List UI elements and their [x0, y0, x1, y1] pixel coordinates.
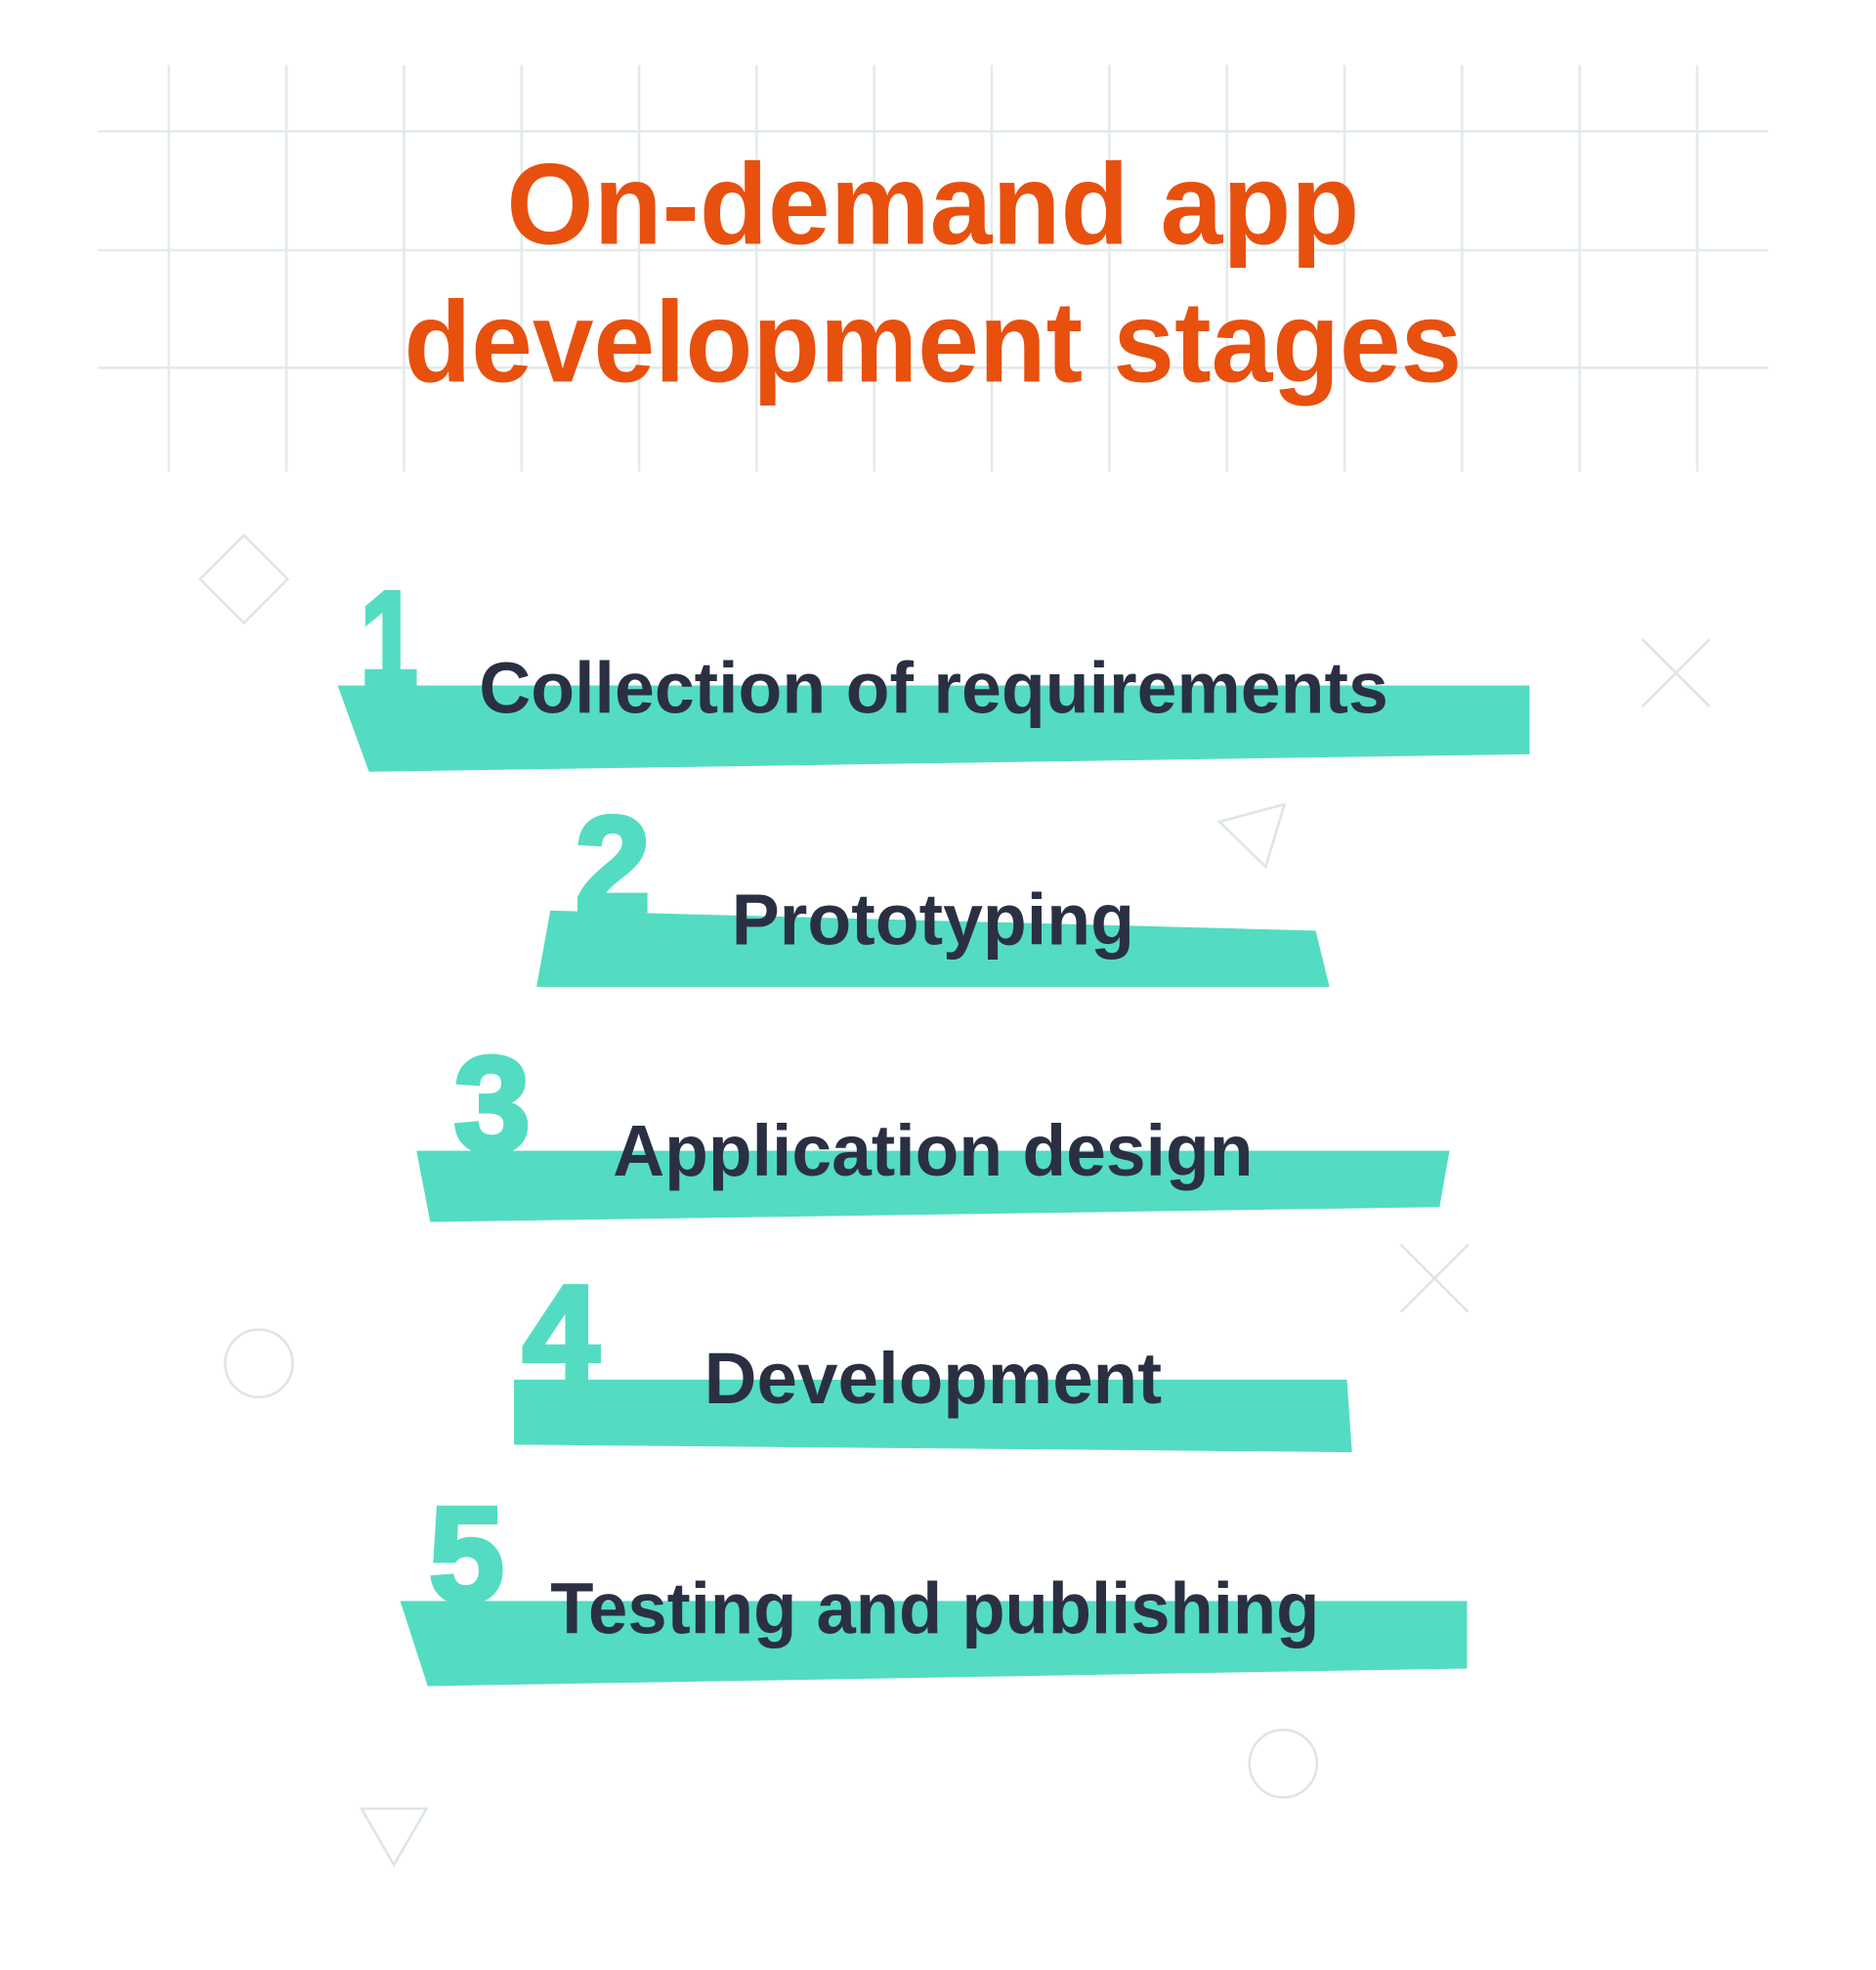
stage 2: 2	[576, 790, 651, 940]
title: On-demand app	[506, 140, 1359, 269]
stage 4	[514, 1259, 1352, 1452]
decorative shapes	[200, 535, 1710, 1864]
stage 1: Collection of requirements	[479, 648, 1388, 729]
stage 3: 3	[454, 1030, 531, 1180]
stage 2	[536, 790, 1330, 987]
stage 5: Testing and publishing	[550, 1568, 1319, 1649]
title: development stages	[404, 277, 1462, 406]
stage 5	[401, 1479, 1467, 1686]
stage 1: 1	[361, 564, 418, 714]
stage 3	[416, 1030, 1450, 1222]
stage 2: Prototyping	[732, 878, 1134, 960]
stage 4: 4	[523, 1259, 599, 1409]
stage 1	[338, 564, 1529, 772]
title	[404, 140, 1462, 406]
stage 4: Development	[704, 1338, 1162, 1419]
stage 5: 5	[429, 1479, 504, 1630]
stage 3: Application design	[613, 1110, 1254, 1191]
